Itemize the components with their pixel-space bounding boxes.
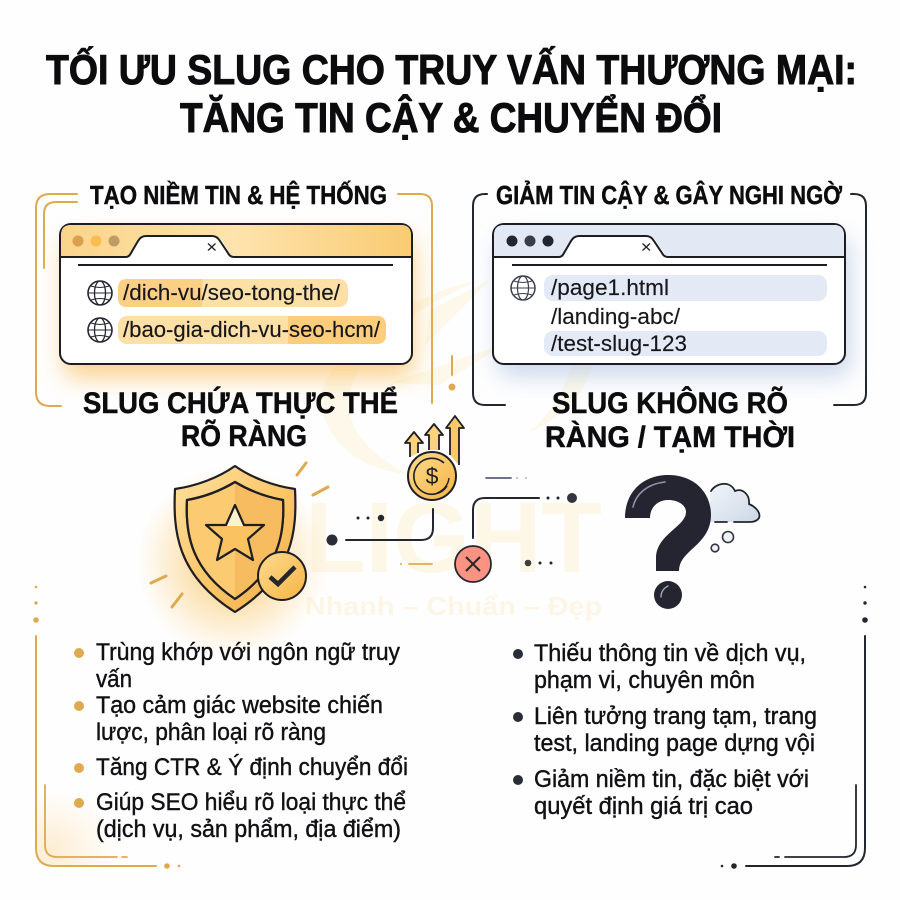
heading: unclear slug: RÀNG / TẠM THỜI <box>545 420 795 454</box>
icon: question mark with cloud <box>625 475 759 609</box>
connector: shield to coin <box>326 509 433 565</box>
frame: bottom left gold corner <box>33 586 180 869</box>
list: left benefits: Giúp SEO hiểu rõ loại thực thể <box>96 789 406 816</box>
subheading: distrust: GIẢM TIN CẬY & GÂY NGHI NGỜ <box>496 180 843 210</box>
list: right drawbacks <box>513 640 817 820</box>
icon: coin with rising arrows <box>405 416 464 500</box>
title: TĂNG TIN CẬY & CHUYỂN ĐỔI <box>180 92 722 141</box>
icon: coin with rising arrows: $ <box>426 463 439 489</box>
list: left benefits <box>74 639 408 843</box>
list: right drawbacks: test, landing page dựng vội <box>534 730 815 757</box>
list: left benefits: vấn <box>96 666 132 693</box>
connector: cross to question <box>473 477 577 566</box>
list: left benefits: (dịch vụ, sản phẩm, địa điểm) <box>96 816 401 843</box>
list: right drawbacks: Thiếu thông tin về dịch vụ, <box>534 640 806 667</box>
slug row 2: /bao-gia-dich-vu-seo-hcm/ <box>123 317 381 342</box>
list: right drawbacks: Giảm niềm tin, đặc biệt với <box>534 766 809 793</box>
title <box>46 45 857 141</box>
bracket: right dark frame <box>473 194 866 405</box>
list: right drawbacks: Liên tưởng trang tạm, trang <box>534 703 817 730</box>
watermark: LIGHT logo <box>305 280 602 621</box>
list: left benefits: Trùng khớp với ngôn ngữ truy <box>96 639 400 666</box>
heading: clear slug: RÕ RÀNG <box>181 419 307 453</box>
slug rows: /landing-abc/ <box>551 304 681 329</box>
bracket: left gold frame <box>36 194 456 406</box>
heading: unclear slug <box>545 386 795 454</box>
icon: red cross circle <box>455 546 491 582</box>
list: left benefits: lược, phân loại rõ ràng <box>96 719 326 746</box>
heading: clear slug <box>83 386 398 453</box>
list: left benefits: Tạo cảm giác website chiến <box>96 692 383 719</box>
icon: globe <box>511 276 535 300</box>
panel: left trust <box>36 180 456 453</box>
watermark: LIGHT logo: LIGHT <box>305 482 602 594</box>
subheading: trust: TẠO NIỀM TIN & HỆ THỐNG <box>90 180 387 210</box>
list: right drawbacks: quyết định giá trị cao <box>534 793 753 820</box>
slug rows: /page1.html <box>551 275 669 300</box>
panel: right distrust <box>473 180 866 454</box>
list: left benefits: Tăng CTR & Ý định chuyển đổi <box>96 754 408 781</box>
list: right drawbacks: phạm vi, chuyên môn <box>534 667 755 694</box>
slug rows <box>544 275 827 356</box>
browser window: good slugs <box>60 224 414 378</box>
browser window: bad slugs <box>493 224 850 376</box>
heading: unclear slug: SLUG KHÔNG RÕ <box>552 386 788 420</box>
watermark: LIGHT logo: Nhanh – Chuẩn – Đẹp <box>305 591 602 621</box>
slug rows: /test-slug-123 <box>551 331 687 356</box>
slug row 1: /dich-vu/seo-tong-the/ <box>123 280 341 305</box>
heading: clear slug: SLUG CHỨA THỰC THỂ <box>83 386 398 420</box>
frame: bottom right dark corner <box>721 586 868 869</box>
icon: shield with star and check <box>136 463 328 658</box>
